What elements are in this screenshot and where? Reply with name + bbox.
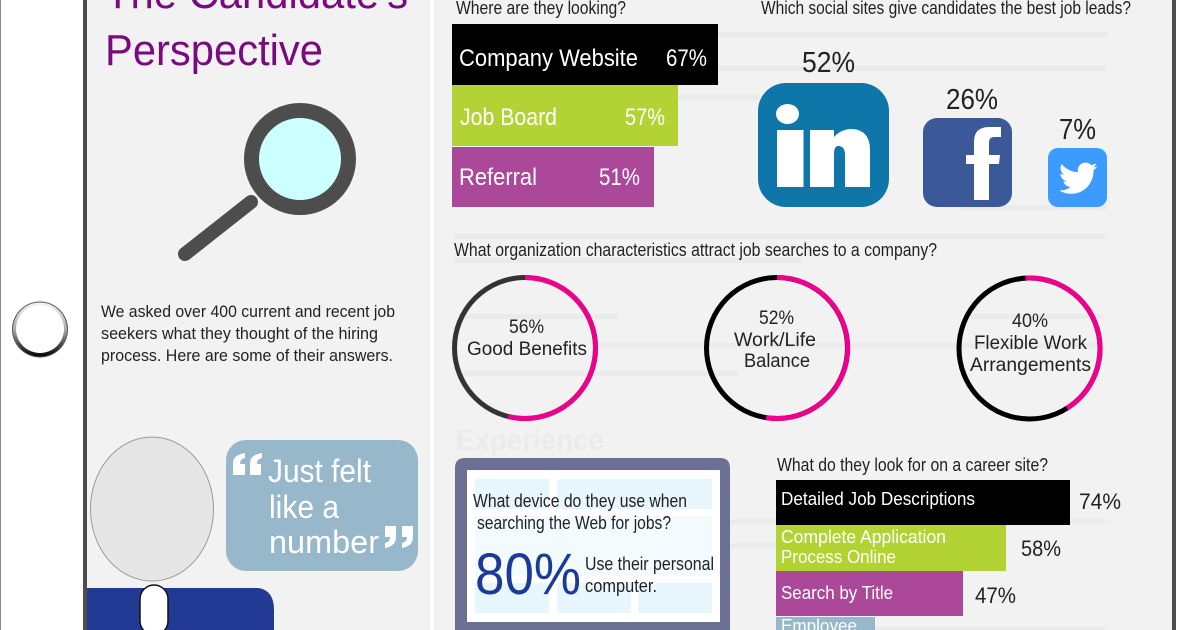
ring: work life balance: Balance	[744, 351, 810, 372]
bar: job board	[452, 85, 678, 146]
bar: complete application: Complete Application	[781, 527, 946, 547]
linkedin stat	[758, 47, 889, 207]
closing quote mark	[385, 526, 413, 548]
bar: complete application	[776, 525, 1061, 571]
ring: good benefits: Good Benefits	[467, 339, 587, 360]
bar: search by title	[776, 571, 1016, 616]
person head	[90, 437, 214, 581]
twitter stat	[1048, 114, 1107, 207]
bar: company website	[452, 24, 718, 85]
bar: detailed job descriptions: Detailed Job Descriptions	[781, 489, 975, 509]
panel: survey results	[434, 0, 1172, 630]
ring: work life balance: Work/Life	[734, 330, 816, 351]
twitter stat: 7%	[1059, 114, 1096, 146]
device question: What device do they use when	[473, 491, 687, 511]
opening quote mark	[233, 453, 262, 475]
ring: flexible work: Arrangements	[970, 355, 1091, 376]
tablet right bezel	[1172, 0, 1176, 630]
ring: good benefits: 56%	[509, 317, 544, 338]
bar: detailed job descriptions: 74%	[1079, 489, 1121, 514]
facebook stat: 26%	[946, 84, 998, 116]
device stat label	[585, 554, 714, 596]
panel: candidate perspective	[87, 0, 430, 630]
quote text	[268, 453, 379, 560]
quote bubble	[226, 440, 418, 571]
bar: referral: Referral	[459, 164, 537, 191]
bar: search by title: 47%	[975, 583, 1016, 608]
social sites chart	[758, 0, 1131, 207]
heading: What organization characteristics attract job searches to a company?	[454, 240, 937, 260]
ring: work life balance	[706, 277, 848, 418]
intro text: We asked over 400 current and recent job	[101, 302, 395, 321]
device question: searching the Web for jobs?	[477, 513, 671, 533]
bar: search by title: Search by Title	[781, 583, 893, 603]
title: Perspective	[105, 26, 323, 75]
ring: flexible work: Flexible Work	[974, 333, 1087, 354]
ring: flexible work	[959, 278, 1100, 419]
linkedin stat: 52%	[802, 47, 855, 79]
title	[105, 0, 408, 75]
intro text: process. Here are some of their answers.	[101, 346, 393, 365]
bar: company website: 67%	[666, 45, 707, 72]
bar: complete application: Process Online	[781, 547, 896, 567]
quote text: like a	[269, 489, 339, 525]
chart: where are they looking	[452, 0, 718, 207]
bar: detailed job descriptions	[776, 480, 1121, 525]
heading: What do they look for on a career site?	[777, 455, 1048, 475]
device question	[473, 491, 687, 533]
ring: flexible work: 40%	[1012, 311, 1048, 332]
person neck	[140, 585, 168, 630]
device tablet callout	[455, 458, 730, 630]
ring: good benefits	[454, 277, 596, 418]
device stat label: Use their personal	[585, 554, 714, 574]
device stat: 80%	[475, 542, 581, 607]
device stat label: computer.	[585, 576, 657, 596]
ring: work life balance: 52%	[759, 308, 794, 329]
tablet left bezel	[83, 0, 87, 630]
intro text	[101, 302, 395, 365]
person body	[87, 588, 274, 630]
bar: referral: 51%	[599, 164, 640, 191]
chart: career site	[776, 455, 1121, 630]
quote text: number	[269, 524, 379, 560]
bar: company website: Company Website	[459, 45, 638, 72]
intro text: seekers what they thought of the hiring	[101, 324, 378, 343]
faint heading: experience: Experience	[456, 424, 604, 457]
characteristics section	[454, 240, 1100, 419]
bar: referral	[452, 147, 654, 207]
bar: job board: Job Board	[460, 104, 557, 131]
quote text: Just felt	[268, 453, 371, 489]
tablet home button	[12, 302, 68, 358]
icon: magnifying glass	[185, 110, 348, 254]
facebook stat	[923, 84, 1012, 207]
bar: job board: 57%	[625, 104, 665, 131]
bar: complete application: 58%	[1021, 536, 1061, 561]
